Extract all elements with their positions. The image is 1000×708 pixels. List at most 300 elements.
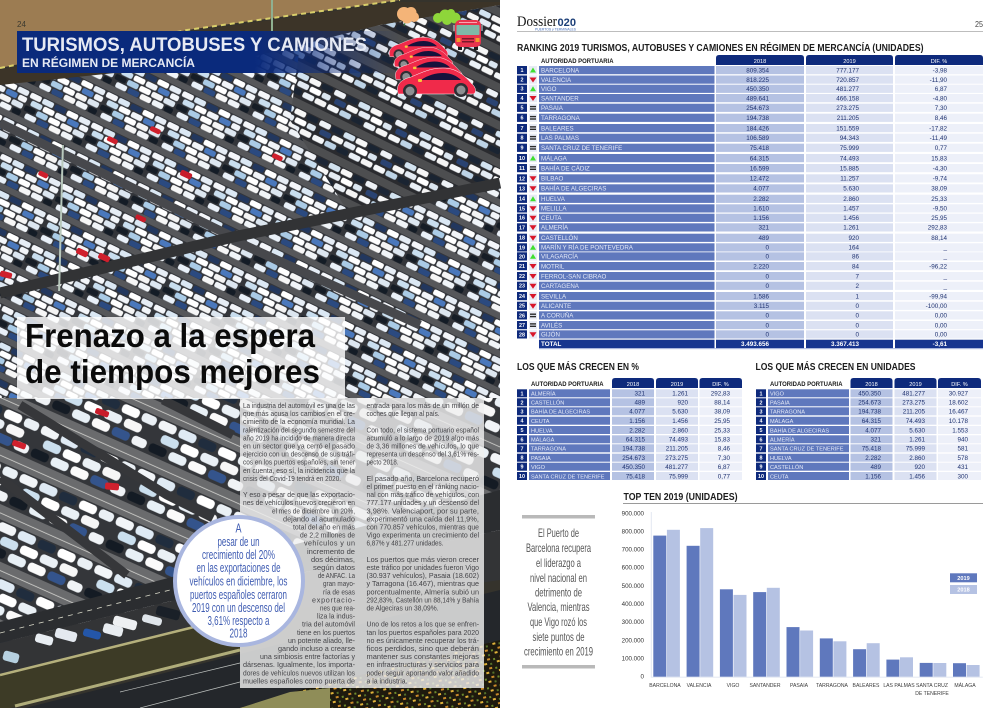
- table: top growth percent: 25,95: [714, 418, 730, 425]
- table: ranking 2019: _: [942, 283, 947, 290]
- table: ranking 2019: SANTA CRUZ DE TENERIFE: [541, 145, 622, 152]
- table: top growth percent: 4.077: [629, 409, 645, 416]
- table: ranking 2019: 14: [519, 197, 525, 203]
- table: ranking 2019: GIJÓN: [541, 332, 560, 339]
- table: ranking 2019: 151.559: [836, 125, 859, 132]
- article column 2: (30.937 vehículos), Pasaia (18.602): [366, 571, 479, 580]
- table: top growth percent: 75.999: [669, 473, 688, 480]
- heading: growth units: LOS QUE MÁS CRECEN EN UNIDADES: [756, 360, 916, 373]
- article column 2: de 3,36 millones de vehículos, lo que: [366, 442, 479, 450]
- table: ranking 2019: 16.599: [750, 165, 769, 172]
- table: ranking 2019: 254.673: [746, 105, 769, 112]
- table: ranking 2019: 0,00: [935, 332, 947, 339]
- x axis labels: SANTANDER: [749, 683, 781, 689]
- title banner: TURISMOS, AUTOBUSES Y CAMIONES: [22, 35, 367, 56]
- table: top growth units: HUELVA: [770, 456, 792, 462]
- table: top growth units: 30.927: [949, 391, 968, 398]
- table: ranking 2019: 12.472: [750, 176, 769, 183]
- table: ranking 2019: 9: [520, 146, 524, 152]
- article column 1: ralentización del segundo semestre del: [243, 425, 355, 434]
- header rule: [517, 31, 983, 32]
- table: top growth percent: 1.156: [629, 418, 645, 425]
- magazine logo: 020: [558, 17, 576, 29]
- table: ranking 2019: 0: [855, 313, 859, 320]
- y axis labels: 600.000: [622, 565, 645, 572]
- table: top growth percent: 5.630: [672, 409, 688, 416]
- table total row: TOTAL: [541, 341, 562, 348]
- table: ranking 2019: 38,09: [931, 186, 947, 193]
- table: top growth percent: 0,77: [718, 473, 730, 480]
- table: ranking 2019: BALEARES: [541, 125, 574, 132]
- article column 2: porcentualmente, Almería subió un: [366, 587, 479, 596]
- icon: row of red cars: [389, 37, 476, 98]
- article column 1: crisis del Covid-19 tendrá en 2020.: [243, 474, 341, 483]
- y axis labels: 700.000: [622, 547, 645, 554]
- side callout: Barcelona: siete puntos de: [532, 630, 585, 644]
- table: ranking 2019: MÁLAGA: [541, 155, 568, 162]
- photo: aerial view of car terminal: [0, 0, 500, 708]
- table: top growth units: 9: [760, 465, 762, 471]
- table: top growth units: 4: [760, 419, 762, 425]
- article column 2: Los puertos que más vieron crecer: [366, 555, 480, 564]
- table: top growth units: 64.315: [862, 418, 881, 425]
- table: ranking 2019: -9,50: [933, 206, 947, 213]
- table: top growth percent: 6,87: [718, 464, 730, 471]
- table: top growth units: 581: [957, 446, 968, 453]
- article column 2: 3,98%. Valenciaport, por su parte,: [366, 506, 479, 515]
- table: top growth units: 2.282: [865, 455, 881, 462]
- table: ranking 2019: 25,95: [931, 215, 947, 222]
- table: top growth units: 321: [870, 437, 881, 444]
- table: top growth percent: 7,30: [718, 455, 730, 462]
- article column 2: [366, 401, 480, 685]
- table: ranking 2019: SANTANDER: [541, 95, 579, 102]
- callout circle: 2018: [230, 626, 248, 640]
- table: top growth units: VIGO: [770, 392, 785, 398]
- table: top growth percent: 10: [519, 474, 525, 480]
- table total row: 3.493.656: [741, 341, 769, 348]
- table: top growth units: 8: [760, 456, 762, 462]
- table: ranking 2019: 1.261: [843, 225, 859, 232]
- table: top growth percent: 64.315: [626, 437, 645, 444]
- table: ranking 2019: 7,30: [935, 105, 947, 112]
- table: top growth units: 3: [760, 409, 762, 415]
- table: ranking 2019: 211.205: [837, 115, 859, 122]
- table total row: [539, 340, 983, 349]
- magazine logo: PUERTOS y TERMINALES: [535, 27, 576, 31]
- table: top growth units: 481.277: [902, 391, 925, 398]
- table: top growth percent: MÁLAGA: [531, 437, 555, 444]
- table: ranking 2019: 64.315: [750, 155, 769, 162]
- table: top growth units: BAHÍA DE ALGECIRAS: [770, 427, 829, 434]
- table: top growth units: 18.602: [949, 400, 968, 407]
- table: top growth units: PASAIA: [770, 401, 790, 407]
- table: top growth units: TARRAGONA: [770, 410, 805, 416]
- table: top growth units: 450.350: [858, 391, 881, 398]
- callout circle: crecimiento del 20%: [202, 548, 275, 562]
- table: top growth percent: CEUTA: [531, 419, 550, 425]
- callout circle: 3,61% respecto a: [208, 614, 270, 628]
- table: ranking 2019: 0: [765, 313, 769, 320]
- table: ranking 2019: 8: [520, 136, 524, 142]
- table: ranking 2019: 0: [765, 254, 769, 261]
- table: ranking 2019: 11.257: [840, 176, 859, 183]
- table: ranking 2019: 74.493: [840, 155, 859, 162]
- table: ranking 2019: CASTELLÓN: [541, 235, 578, 242]
- table header: AUTORIDAD PORTUARIA: [541, 58, 614, 65]
- table: top growth units: 2: [760, 400, 762, 406]
- article column 1: total del año en más: [293, 522, 355, 532]
- table: top growth percent: 321: [634, 391, 645, 398]
- table: ranking 2019: AVILÉS: [541, 322, 562, 329]
- table: top growth percent: 1.456: [672, 418, 688, 425]
- article column 1: dores de vehículos nuevos utilizan los: [243, 668, 355, 677]
- x axis labels: BALEARES: [853, 683, 880, 689]
- table: ranking 2019: 1.457: [843, 206, 859, 213]
- table: ranking 2019: HUELVA: [541, 196, 566, 203]
- table: ranking 2019: 321: [758, 225, 769, 232]
- table: top growth percent: 2019: [671, 382, 683, 388]
- y axis labels: 900.000: [622, 510, 645, 517]
- table: ranking 2019: 16: [519, 216, 525, 222]
- table: top growth units: [756, 378, 981, 480]
- table: top growth units: 5.630: [909, 427, 925, 434]
- table: top growth units: 74.493: [906, 418, 925, 425]
- table: ranking 2019: TARRAGONA: [541, 115, 581, 122]
- table: top growth units: MÁLAGA: [770, 418, 794, 425]
- table: top growth units: 5: [760, 428, 762, 434]
- icon: peach tree: [397, 7, 419, 26]
- article column 2: mantener sus constantes mejoras: [366, 652, 479, 661]
- side callout: Barcelona: El Puerto de: [538, 526, 579, 540]
- article column 1: muelles españoles como puerta de: [243, 676, 355, 685]
- article column 1: una simbiosis entre factorías y: [260, 652, 355, 661]
- article column 2: Uno de los retos a los que se enfren-: [366, 620, 480, 629]
- article column 2: entrada para los más de un millón de: [366, 401, 479, 410]
- article column 2: con 770.857 vehículos, mientras que: [366, 522, 479, 532]
- table: ranking 2019: 1: [520, 68, 524, 74]
- bar chart: top ten 2019: [622, 510, 983, 697]
- table: ranking 2019: 17: [519, 225, 525, 231]
- table: top growth percent: 75.418: [626, 473, 645, 480]
- table: ranking 2019: 10: [519, 156, 525, 162]
- table: ranking 2019: 13: [519, 186, 525, 192]
- table: top growth percent: 450.350: [622, 464, 645, 471]
- table: ranking 2019: VALENCIA: [541, 77, 572, 84]
- table: top growth units: 10.178: [949, 418, 968, 425]
- table: top growth percent: 2.860: [672, 427, 688, 434]
- table: top growth units: ALMERÍA: [770, 437, 795, 444]
- article column 1: dejando al acumulado: [283, 514, 355, 523]
- chart legend: [950, 573, 977, 594]
- table: ranking 2019: 11: [519, 166, 525, 172]
- heading: top ten chart: TOP TEN 2019 (UNIDADES): [624, 492, 738, 503]
- table: top growth percent: 4: [520, 419, 524, 425]
- table: ranking 2019: -4,80: [933, 95, 947, 102]
- table: top growth percent: AUTORIDAD PORTUARIA: [531, 381, 604, 388]
- x axis labels: TARRAGONA: [816, 683, 849, 689]
- table: top growth units: 75.418: [862, 446, 881, 453]
- table: ranking 2019: 0: [855, 303, 859, 310]
- table total row: -3,61: [933, 341, 947, 348]
- article column 2: en infraestructuras y servicios para: [366, 660, 479, 669]
- table: top growth units: 1.553: [952, 427, 968, 434]
- article column 2: experimentó una caída del 11,9%,: [366, 514, 479, 523]
- y axis labels: 500.000: [622, 583, 645, 590]
- y axis labels: 100.000: [622, 656, 645, 662]
- x axis labels: BARCELONA: [649, 683, 681, 689]
- article column 1: Y eso a pesar de que las exportacio-: [243, 490, 356, 499]
- article column 1: liza la indus-: [317, 612, 356, 621]
- table: ranking 2019: -9,74: [933, 176, 947, 183]
- table: ranking 2019: _: [942, 254, 947, 261]
- table: ranking 2019: _: [942, 245, 947, 252]
- table: ranking 2019: 6,87: [935, 86, 947, 93]
- table: ranking 2019: LAS PALMAS: [541, 135, 579, 142]
- table: ranking 2019: 164: [848, 245, 859, 252]
- table: ranking 2019: 3.115: [754, 303, 769, 310]
- headline panel: [17, 317, 345, 399]
- table: ranking 2019: 920: [848, 235, 859, 242]
- table: ranking 2019: CARTAGENA: [541, 283, 580, 290]
- x axis labels: DE TENERIFE: [915, 691, 949, 697]
- table: ranking 2019: 19: [519, 245, 525, 251]
- table: top growth percent: 273.275: [665, 455, 688, 462]
- table: ranking 2019: -3,98: [933, 67, 947, 74]
- callout circle: pesar de un: [218, 535, 260, 549]
- table: top growth percent: 74.493: [669, 437, 688, 444]
- x axis labels: LAS PALMAS: [883, 683, 915, 689]
- article column 2: tan los puertos españoles para 2020: [366, 628, 479, 637]
- table: top growth units: 4.077: [865, 427, 881, 434]
- table: ranking 2019: 15,83: [931, 155, 947, 162]
- table: ranking 2019: 8,46: [935, 115, 947, 122]
- table: ranking 2019: 94.343: [840, 135, 859, 142]
- table: top growth percent: 2.282: [629, 427, 645, 434]
- table: ranking 2019: 25,33: [931, 196, 947, 203]
- article column 2: 292,83%, Castellón un 88,14% y Bahía: [366, 595, 479, 604]
- table: ranking 2019: SEVILLA: [541, 293, 567, 300]
- table: ranking 2019: 26: [519, 313, 525, 319]
- table: top growth percent: 88,14: [714, 400, 730, 407]
- table: top growth percent: TARRAGONA: [531, 447, 566, 453]
- article column 2: de Algeciras un 38,09%.: [366, 604, 438, 612]
- table: ranking 2019: 2: [855, 283, 859, 290]
- table total row: 3.367.413: [831, 341, 859, 348]
- magazine logo: Dossier: [517, 14, 557, 30]
- article column 1: año 2019 ha incidido de manera directa: [243, 433, 355, 442]
- table: top growth percent: 5: [520, 428, 524, 434]
- table: ranking 2019: 25: [519, 304, 525, 310]
- article column 1: el mes de diciembre un 20%,: [272, 506, 355, 515]
- x axis labels: VIGO: [727, 683, 739, 689]
- table: top growth units: 2018: [865, 382, 878, 388]
- table: top growth units: SANTA CRUZ DE TENERIFE: [770, 447, 844, 453]
- table: top growth percent: 194.738: [622, 446, 645, 453]
- table: top growth percent: 9: [520, 465, 524, 471]
- table: ranking 2019: 7: [520, 126, 524, 132]
- table: top growth units: 194.738: [858, 409, 881, 416]
- table: ranking 2019: 84: [852, 263, 859, 270]
- article column 2: representa un descenso del 3,61% res-: [366, 450, 480, 459]
- table: ranking 2019: 24: [519, 294, 525, 300]
- table: top growth percent: CASTELLÓN: [531, 400, 564, 407]
- article column 2: el primer puesto en el ránking nacio-: [366, 482, 480, 491]
- table: ranking 2019: 0,00: [935, 322, 947, 329]
- table: top growth units: 211.205: [903, 409, 925, 416]
- table: top growth percent: 8,46: [718, 446, 730, 453]
- table: top growth percent: 920: [677, 400, 688, 407]
- table: top growth units: 2019: [909, 382, 922, 388]
- table: ranking 2019: 18: [519, 236, 525, 242]
- table: top growth units: 2.860: [909, 455, 925, 462]
- table: ranking 2019: BILBAO: [541, 176, 564, 183]
- table: ranking 2019: 21: [519, 264, 525, 270]
- table: top growth percent: 292,83: [711, 391, 730, 398]
- icon: bus: [454, 20, 482, 50]
- heading: growth percent: LOS QUE MÁS CRECEN EN %: [517, 360, 639, 373]
- x axis labels: SANTA CRUZ: [916, 683, 948, 689]
- table: ranking 2019: 818.225: [746, 77, 769, 84]
- article column 1: de ANFAC. La: [318, 571, 355, 580]
- table: ranking 2019: 0: [765, 332, 769, 339]
- table: top growth units: 273.275: [902, 400, 925, 407]
- table: ranking 2019: -11,49: [930, 135, 947, 142]
- table header: 2018: [754, 59, 766, 65]
- x axis labels: VALENCIA: [687, 683, 712, 689]
- table: top growth units: 940: [957, 437, 968, 444]
- table: ranking 2019: 0: [855, 332, 859, 339]
- article column 1: en cuenta, eso sí, la incidencia que la: [243, 466, 355, 475]
- article column 1: de 2,2 millones de: [300, 531, 355, 540]
- callout circle: en las exportaciones de: [196, 561, 281, 575]
- article column 2: a la industria.: [366, 676, 408, 685]
- table: top growth percent: 211.205: [666, 446, 688, 453]
- table: ranking 2019: 1.586: [753, 293, 769, 300]
- table: ranking 2019: 450.350: [746, 86, 769, 93]
- table: ranking 2019: 7: [855, 273, 859, 280]
- table: ranking 2019: 23: [519, 284, 525, 290]
- table: top growth percent: 7: [520, 446, 524, 452]
- article column 2: no es únicamente recuperar los trá-: [366, 636, 480, 645]
- article column 1: dos décimas,: [311, 555, 355, 564]
- table: top growth units: 16.467: [949, 409, 968, 416]
- table: ranking 2019: BAHÍA DE CÁDIZ: [541, 165, 590, 172]
- table: ranking 2019: 273.275: [836, 105, 859, 112]
- article column 2: 777.177 unidades y un descenso del: [366, 498, 479, 507]
- article column 1: dársenas. Igualmente, los importa-: [243, 660, 356, 669]
- article column 2: Con todo, el sistema portuario español: [366, 425, 479, 434]
- table: ranking 2019: 5: [520, 106, 524, 112]
- table: top growth percent: PASAIA: [531, 456, 551, 462]
- article column 2: ficos perdidos, sino que deberán: [366, 644, 479, 653]
- table: top growth percent: [517, 378, 742, 480]
- table: ranking 2019: 0: [765, 322, 769, 329]
- page number left: 24: [17, 19, 26, 29]
- table: ranking 2019: 22: [519, 274, 525, 280]
- table: top growth units: 578: [957, 455, 968, 462]
- table: ranking 2019: 0: [765, 283, 769, 290]
- table: ranking 2019: 466.158: [836, 95, 859, 102]
- table: top growth units: 1.456: [909, 473, 925, 480]
- table: top growth units: 489: [870, 464, 881, 471]
- table: ranking 2019: BAHÍA DE ALGECIRAS: [541, 186, 606, 193]
- table: ranking 2019: 75.999: [840, 145, 859, 152]
- table: ranking 2019: 292,83: [928, 225, 947, 232]
- table: top growth units: AUTORIDAD PORTUARIA: [770, 381, 843, 388]
- table: ranking 2019: 489: [758, 235, 769, 242]
- table: top growth units: 300: [957, 473, 968, 480]
- table: ranking 2019: 0: [765, 245, 769, 252]
- x axis labels: PASAIA: [790, 683, 809, 689]
- headline panel: Frenazo a la espera: [25, 317, 316, 354]
- table: ranking 2019: 2.860: [843, 196, 859, 203]
- side callout: Barcelona: detrimento de: [535, 586, 582, 600]
- table: ranking 2019: 0: [855, 322, 859, 329]
- table: ranking 2019: ALMERÍA: [541, 225, 569, 232]
- table: ranking 2019: 1.156: [753, 215, 769, 222]
- article column 2: nal con más tráfico de vehículos, con: [366, 490, 479, 499]
- table: ranking 2019: -4,30: [933, 165, 947, 172]
- table: top growth percent: 3: [520, 409, 524, 415]
- table: ranking 2019: VIGO: [541, 86, 557, 93]
- article column 1: un potente aliado, lle-: [288, 636, 356, 645]
- side callout: Barcelona: crecimiento en 2019: [524, 644, 593, 658]
- article column 1: incremento de: [307, 547, 355, 556]
- table: top growth units: 7: [760, 446, 762, 452]
- table header: 2019: [843, 59, 856, 65]
- article column 2: este tráfico por unidades fueron Vigo: [366, 563, 479, 572]
- table: ranking 2019: 6: [520, 116, 524, 122]
- article column 1: cimiento de la economía mundial. La: [243, 417, 355, 426]
- table: top growth percent: VIGO: [531, 465, 546, 471]
- table: ranking 2019: 184.426: [746, 125, 769, 132]
- article column 1: en un sector que ya cerró el pasado: [243, 442, 355, 450]
- table: ranking 2019: MOTRIL: [541, 263, 565, 270]
- y axis labels: 300.000: [622, 619, 645, 626]
- article column 1: según datos: [313, 563, 355, 572]
- table: top growth units: 254.673: [858, 400, 881, 407]
- article column 2: acumuló a lo largo de 2019 algo más: [366, 433, 479, 442]
- table: top growth units: 431: [957, 464, 968, 471]
- table: ranking 2019: 106.589: [746, 135, 769, 142]
- table: ranking 2019: 4.077: [753, 186, 769, 193]
- table: top growth percent: 254.673: [622, 455, 645, 462]
- table: top growth percent: HUELVA: [531, 428, 553, 434]
- table: top growth percent: 1.261: [672, 391, 688, 398]
- article column 1: [243, 401, 356, 685]
- table: top growth percent: ALMERÍA: [531, 391, 556, 398]
- callout circle: vehículos en diciembre, los: [190, 574, 288, 588]
- headline panel: de tiempos mejores: [25, 353, 320, 390]
- table: top growth percent: SANTA CRUZ DE TENERIFE: [531, 474, 605, 480]
- table: top growth units: 1: [760, 391, 762, 397]
- article text panel: [240, 398, 484, 688]
- table: ranking 2019: 15: [519, 206, 525, 212]
- table: ranking 2019: 0,77: [935, 145, 947, 152]
- title banner: [17, 31, 400, 73]
- chart legend: 2019: [957, 576, 970, 582]
- table: top growth percent: 8: [520, 456, 524, 462]
- article column 1: nes de vehículos nuevos crecieron en: [243, 498, 355, 507]
- table: top growth units: DIF. %: [951, 382, 968, 388]
- y axis labels: 400.000: [622, 601, 645, 608]
- callout circle: puertos españoles cerraron: [190, 588, 287, 602]
- table: ranking 2019: _: [942, 273, 947, 280]
- side callout: Barcelona: Barcelona recupera: [526, 541, 591, 555]
- table: ranking 2019: MARÍN Y RÍA DE PONTEVEDRA: [541, 245, 634, 252]
- table: top growth percent: 489: [634, 400, 645, 407]
